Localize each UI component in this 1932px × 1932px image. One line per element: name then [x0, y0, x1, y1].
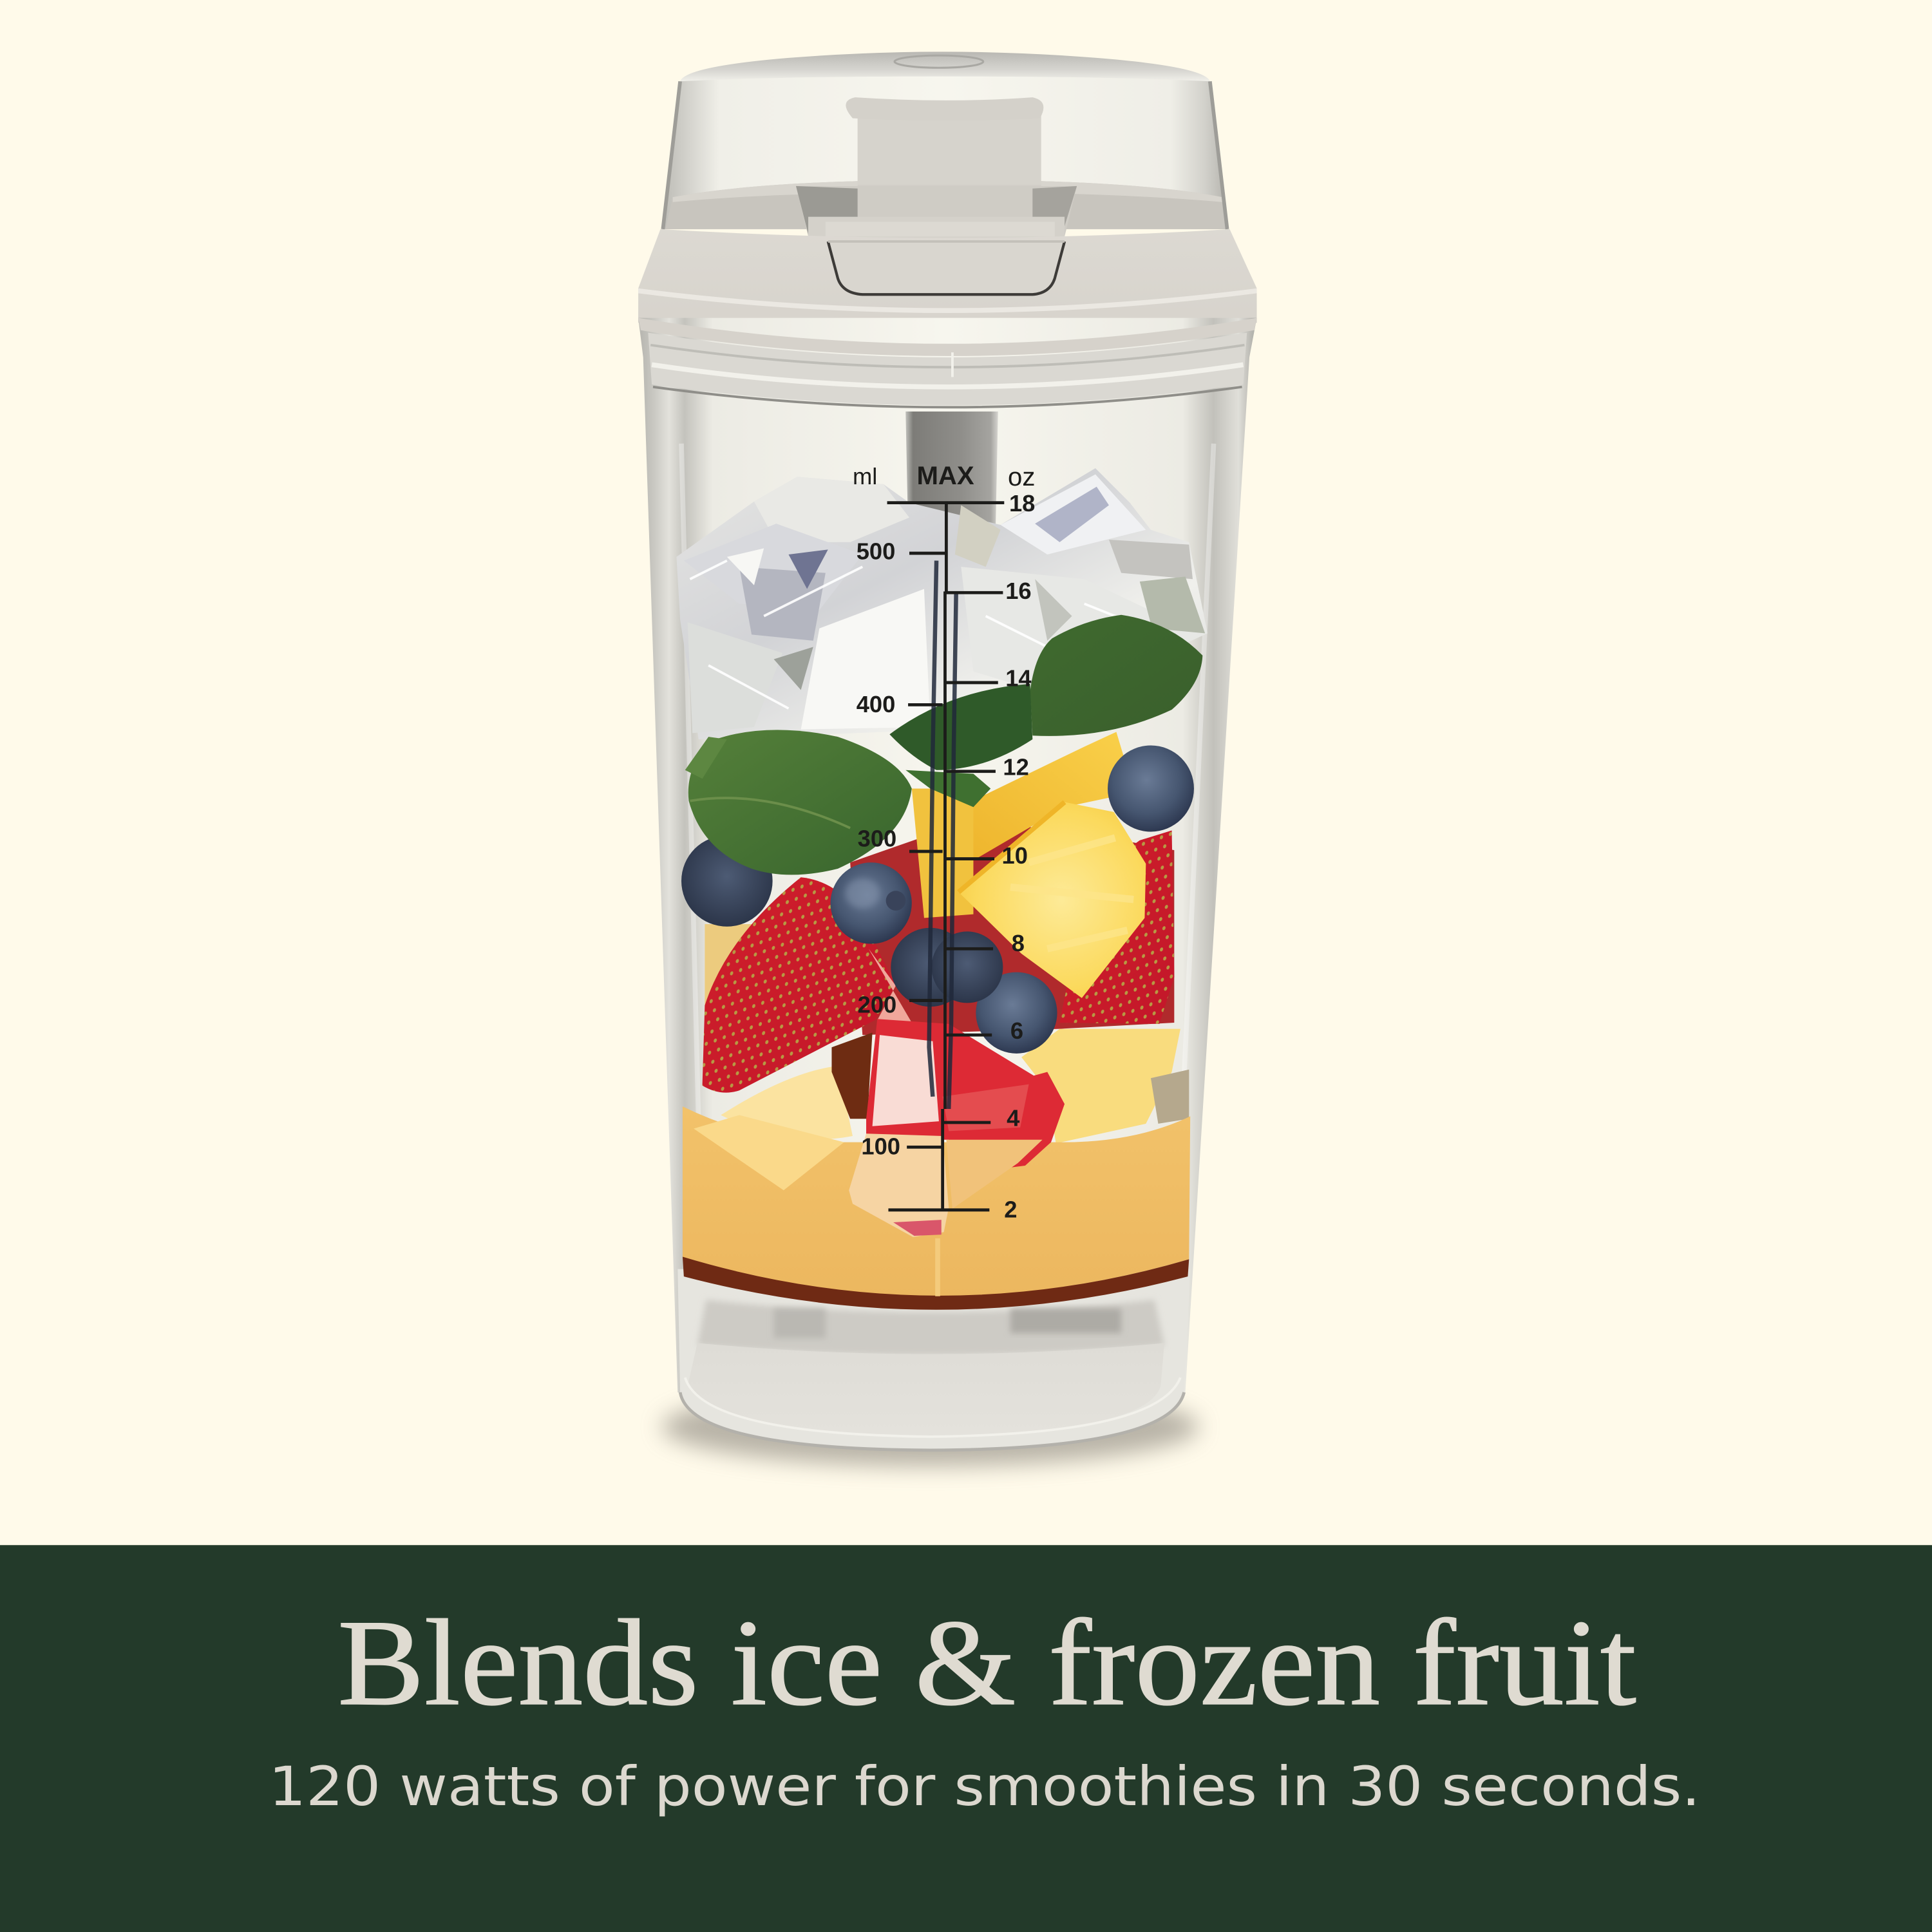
product: portable blender: [638, 52, 1257, 1466]
lid latch window: [796, 186, 1077, 244]
strawberries: [703, 831, 1174, 1119]
measurement scale: [853, 461, 1035, 1222]
measurement scale: 16: [1005, 578, 1032, 604]
dark gap: [831, 1032, 873, 1119]
measurement scale: 10: [1001, 842, 1028, 869]
measurement scale: 6: [1010, 1018, 1023, 1044]
strawberry slice centre: [849, 1019, 1065, 1237]
ice cubes: [676, 468, 1208, 739]
heading: Blends ice & frozen fruit: [337, 1595, 1636, 1731]
lid collar: [638, 229, 1257, 346]
measurement scale: 400: [857, 691, 895, 717]
blueberries: [681, 746, 1194, 1054]
strawberry large left: [703, 877, 912, 1093]
transparent lid dome: [663, 52, 1227, 229]
rear fruit fill: [850, 819, 1174, 1035]
spinach leaves: [685, 615, 1202, 875]
pineapple chunks rear: [705, 732, 1189, 1144]
lid plunger button: [846, 97, 1043, 222]
juice layer: [683, 1106, 1190, 1310]
blender cup body: [638, 318, 1257, 1423]
measurement scale: 4: [1007, 1105, 1020, 1132]
strawberry right: [1059, 831, 1174, 1024]
measurement scale: 12: [1003, 753, 1029, 780]
measurement scale: 100: [861, 1133, 900, 1160]
footer band: [0, 1545, 1932, 1932]
blade shaft: [905, 412, 998, 530]
measurement scale: MAX: [916, 461, 974, 490]
scale units: ml: [853, 463, 877, 489]
measurement scale: 14: [1005, 665, 1032, 692]
measurement scale: 8: [1012, 930, 1025, 956]
measurement scale: oz: [1008, 462, 1035, 491]
measurement scale: 2: [1004, 1196, 1018, 1222]
ml marks: 500: [857, 538, 895, 565]
measurement scale: 300: [858, 825, 896, 851]
pineapple chunk front: [959, 802, 1146, 998]
refraction line of the scale: [929, 561, 956, 1109]
measurement scale: 200: [858, 992, 896, 1018]
subheading: 120 watts of power for smoothies in 30 seconds.: [269, 1755, 1700, 1818]
oz marks: 18: [1009, 490, 1035, 516]
shadow under blender: [661, 1387, 1199, 1466]
blender base: [677, 1269, 1190, 1450]
